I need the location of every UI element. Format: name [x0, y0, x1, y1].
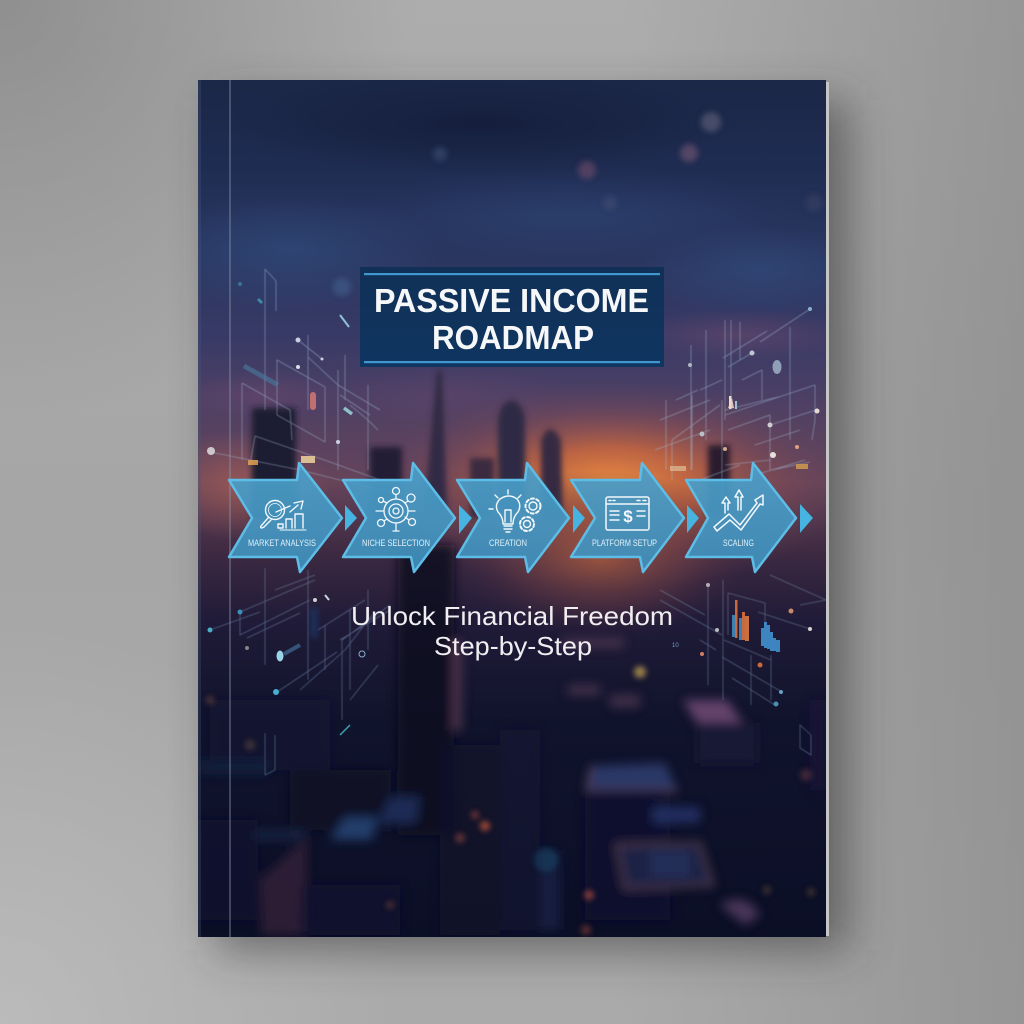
step 1: market analysis — [229, 463, 342, 572]
spine fold line — [198, 80, 231, 937]
title text: PASSIVE INCOME — [374, 282, 649, 319]
digital circuit overlay: upper left — [214, 268, 380, 482]
connector triangle 4 — [687, 505, 699, 533]
subtitle: Unlock Financial Freedom — [351, 601, 673, 631]
step 5: scaling: SCALING — [723, 538, 754, 548]
title banner — [360, 267, 664, 367]
bokeh and blurred city lights — [206, 112, 823, 935]
step 4: platform setup: $ — [623, 507, 633, 526]
blurred skyline towers — [252, 370, 730, 520]
step 5: scaling — [686, 463, 796, 572]
blurred city below skyline — [198, 545, 826, 935]
step 4: platform setup: PLATFORM SETUP — [592, 538, 657, 548]
digital circuit overlay: lower right — [660, 575, 826, 755]
book cover — [198, 80, 826, 937]
icon: lightbulb and gears — [489, 490, 540, 532]
cover sky background — [198, 80, 826, 937]
step 2: niche selection: NICHE SELECTION — [362, 538, 430, 548]
mini bar chart: orange and blue — [732, 600, 780, 652]
subtitle: Step-by-Step — [434, 631, 592, 661]
step 1: market analysis: MARKET ANALYSIS — [248, 538, 316, 548]
subtitle — [351, 601, 673, 661]
icon: rising arrows — [714, 490, 763, 531]
icon: target with network nodes — [376, 488, 416, 531]
dusk clouds — [198, 102, 826, 534]
connector triangle 2 — [459, 505, 472, 534]
digital nodes: lower right — [672, 583, 812, 706]
connector triangle 1 — [345, 505, 357, 531]
digital circuit overlay: upper right — [655, 309, 816, 500]
page edges — [824, 82, 829, 936]
digital nodes: upper right — [670, 307, 820, 471]
icon: browser window with dollar — [606, 497, 649, 530]
digital nodes: lower right: 10 — [672, 643, 679, 649]
connector triangle 3 — [573, 505, 585, 533]
book drop shadow — [216, 100, 848, 950]
step 3: creation — [457, 463, 569, 572]
connector triangle 5 — [800, 504, 813, 533]
title banner: ROADMAP — [432, 319, 594, 356]
digital circuit overlay: lower left — [210, 568, 390, 775]
step 3: creation: CREATION — [489, 538, 527, 548]
sunset glow — [420, 394, 805, 628]
icon: magnifier and bar chart — [261, 500, 306, 530]
process roadmap arrows — [229, 463, 813, 572]
step 2: niche selection — [343, 463, 455, 572]
digital nodes: upper left — [207, 282, 352, 465]
step 4: platform setup — [571, 463, 684, 572]
digital nodes: lower left — [208, 595, 365, 735]
